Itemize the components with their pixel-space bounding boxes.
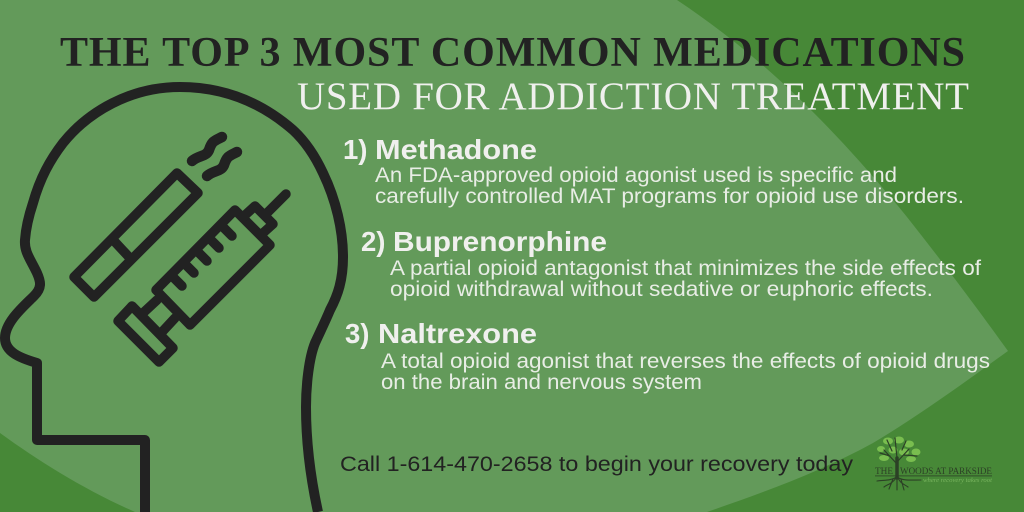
item 1 description: An FDA-approved opioid agonist used is specific and [375,163,897,187]
syringe needle [243,194,286,233]
logo tagline: where recovery takes root [923,477,992,484]
item 1 heading: 1) [343,134,367,165]
item 3: Naltrexone [345,318,990,394]
icon: syringe [118,194,286,362]
icon: cigarette and smoke [74,137,237,297]
item 1 description: carefully controlled MAT programs for opioid use disorders. [375,184,964,208]
logo underline [875,474,992,477]
syringe tick marks [171,226,232,286]
logo name: WOODS AT PARKSIDE [900,466,992,476]
title line 1: THE TOP 3 MOST COMMON MEDICATIONS [60,30,965,76]
item 1 heading: Methadone [375,134,537,165]
title line 2: USED FOR ADDICTION TREATMENT [297,75,969,118]
item 2 description: A partial opioid antagonist that minimizes the side effects of [390,256,981,280]
item 2 heading: Buprenorphine [393,226,607,257]
cigarette [74,173,198,297]
icon: head outline [5,87,343,512]
call to action: Call 1-614-470-2658 to begin your recovery today [340,452,853,476]
item 2: Buprenorphine [361,226,981,301]
logo tree foliage [877,436,920,462]
title [60,30,969,118]
item 3 description: A total opioid agonist that reverses the effects of opioid drugs [381,349,990,373]
item 2 description: opioid withdrawal without sedative or euphoric effects. [390,277,933,301]
syringe barrel [156,210,270,325]
logo: The Woods at Parkside [875,436,992,490]
logo name: THE [875,466,894,476]
syringe plunger [118,300,175,362]
item 3 heading: 3) [345,318,369,349]
item 2 heading: 2) [361,226,385,257]
smoke [192,137,237,176]
item 3 description: on the brain and nervous system [381,370,702,394]
item 3 heading: Naltrexone [378,318,537,349]
logo tree trunk and roots [877,438,921,490]
item 1: Methadone [343,134,964,208]
